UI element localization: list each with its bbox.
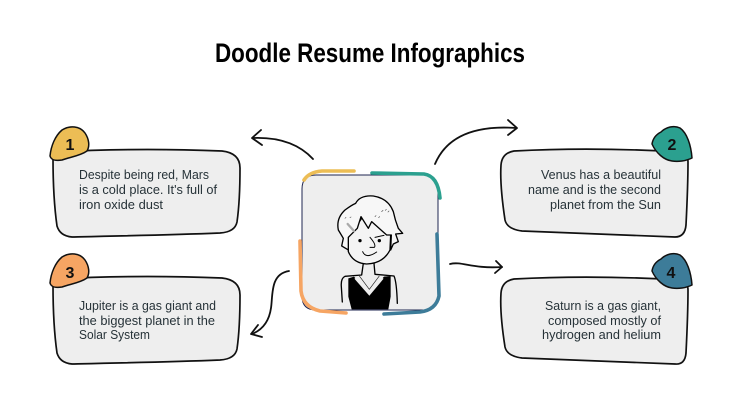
card 1 text: iron oxide dust	[79, 198, 164, 212]
shoulders and neck	[341, 263, 397, 303]
card 4 text: hydrogen and helium	[542, 328, 661, 342]
person drawing	[338, 196, 403, 309]
frame accent: blue	[384, 234, 439, 314]
card 2 number: 2	[668, 137, 677, 154]
arrow: to card 3	[251, 271, 289, 337]
card 2 text: planet from the Sun	[550, 198, 661, 212]
card 2 badge	[652, 127, 692, 161]
panel: card 3	[50, 254, 240, 364]
card 1 number: 1	[66, 137, 75, 154]
card 2 text: Venus has a beautiful	[541, 168, 661, 182]
frame accent: orange	[300, 241, 346, 313]
top	[348, 276, 391, 309]
card 3 number: 3	[66, 265, 75, 282]
title: Doodle Resume Infographics	[215, 38, 525, 68]
arrow: to card 2	[435, 120, 517, 164]
card 4 text: Saturn is a gas giant,	[545, 299, 661, 313]
frame accent: yellow	[304, 171, 354, 180]
card 3 text: Jupiter is a gas giant and	[79, 299, 216, 313]
card 1 text: Despite being red, Mars	[79, 168, 209, 182]
frame accent: teal	[372, 173, 440, 198]
card 2 text: name and is the second	[528, 183, 661, 197]
panel: card 2	[501, 127, 692, 237]
card 2 box	[501, 149, 688, 237]
eyes, nose, mouth	[363, 235, 384, 256]
card 4 box	[501, 277, 688, 364]
arrow: to card 1	[252, 130, 313, 159]
panel: card 1	[50, 127, 240, 237]
card 3 text: Solar System	[79, 328, 150, 342]
panel: card 4	[501, 254, 692, 364]
hair	[338, 196, 403, 250]
face	[348, 218, 391, 264]
portrait frame	[302, 175, 438, 310]
card 4 text: composed mostly of	[548, 314, 661, 328]
card 3 text: the biggest planet in the	[79, 314, 215, 328]
panel: central portrait	[300, 171, 440, 314]
hair clip	[348, 224, 354, 231]
card 1 badge	[50, 127, 89, 160]
card 3 badge	[50, 254, 89, 287]
card 3 box	[53, 277, 240, 364]
arrow: to card 4	[450, 261, 502, 273]
card 1 box	[53, 150, 240, 237]
card 1 text: is a cold place. It's full of	[79, 183, 218, 197]
hair highlights	[345, 209, 389, 218]
card 4 badge	[652, 254, 692, 288]
card 4 number: 4	[667, 265, 676, 282]
